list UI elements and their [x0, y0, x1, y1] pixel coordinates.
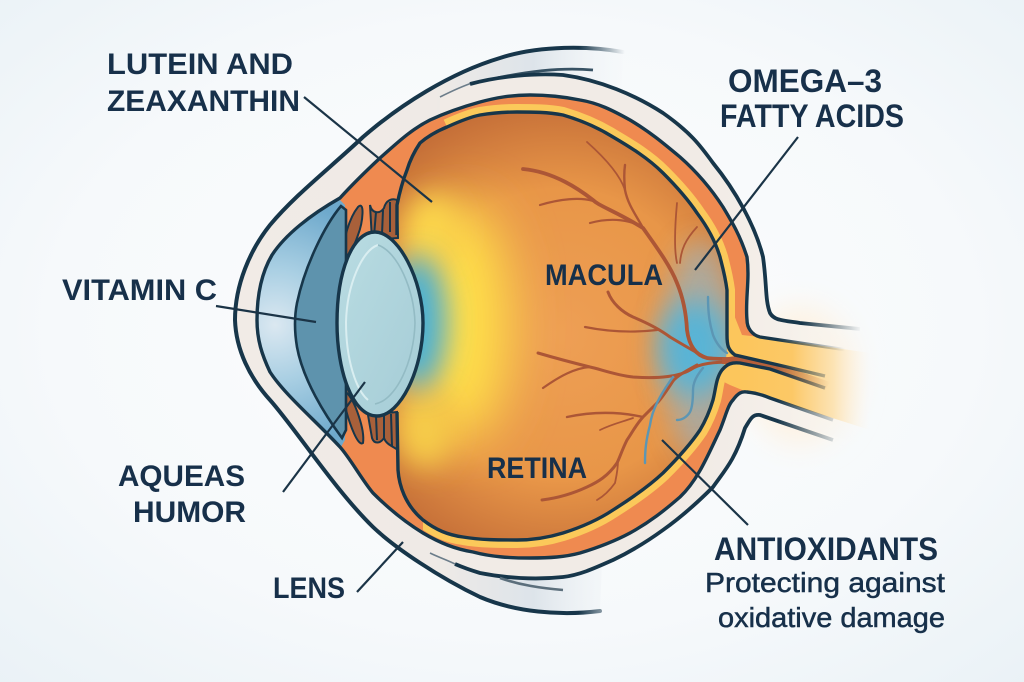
outline: sclera bottom — [455, 415, 833, 578]
optic nerve — [720, 300, 870, 430]
choroid band — [257, 95, 847, 558]
outline: sclera top — [470, 74, 860, 329]
ciliary muscle — [345, 392, 363, 443]
globe interior — [394, 114, 727, 538]
lower left yellow edge — [397, 392, 453, 468]
upper ciliary body — [337, 118, 447, 273]
lens — [337, 232, 423, 416]
label: omega-3 fatty acids — [720, 63, 904, 134]
ciliary fibres — [370, 199, 398, 240]
label: aqueas humor: HUMOR — [133, 496, 246, 529]
label: antioxidants: Protecting against — [705, 567, 945, 598]
ciliary muscle — [344, 206, 363, 256]
label: lutein and zeaxanthin — [107, 48, 300, 118]
leader: omega-3 — [695, 137, 798, 270]
outer eye layer fill — [235, 48, 623, 613]
orange base — [394, 114, 727, 538]
label: antioxidants — [705, 531, 945, 633]
leader: lens — [357, 542, 403, 592]
lens inner rim — [375, 245, 415, 404]
label: retina: RETINA — [487, 452, 587, 485]
upper left yellow edge — [404, 194, 460, 270]
grey tone near macula — [664, 240, 736, 460]
leader: antioxidants — [662, 440, 748, 525]
yellow glow — [414, 202, 510, 442]
label: antioxidants: ANTIOXIDANTS — [714, 531, 938, 567]
label: lens: LENS — [273, 572, 345, 605]
blue glow behind lens — [390, 256, 446, 388]
eye diagram — [235, 48, 875, 613]
label: omega-3 fatty acids: FATTY ACIDS — [720, 98, 904, 134]
label: lutein and zeaxanthin: ZEAXANTHIN — [107, 85, 300, 118]
fibre lines — [376, 414, 392, 446]
orange tissue — [336, 377, 423, 533]
outline: sclera tail bottom — [500, 578, 563, 590]
outline: sclera bottom taper — [430, 553, 455, 564]
label: aqueas humor — [118, 460, 246, 529]
leader: aqueous humor — [283, 382, 365, 492]
ciliary fibres — [368, 412, 398, 450]
sclera — [430, 74, 875, 578]
lens highlight — [346, 245, 378, 400]
outline: sclera top taper — [440, 83, 472, 97]
label: lutein and zeaxanthin: LUTEIN AND — [107, 48, 293, 81]
outline: retina top — [397, 112, 825, 376]
label: omega-3 fatty acids: OMEGA–3 — [728, 63, 882, 99]
optic nerve vessel bundle — [722, 356, 830, 390]
warm glow behind optic nerve — [745, 305, 855, 445]
cornea outer chamber — [257, 200, 345, 447]
blood vessels — [523, 142, 733, 500]
outline: sclera tail top — [497, 69, 593, 78]
blue optic disc glow — [659, 300, 731, 396]
fibre lines — [374, 202, 390, 236]
label: aqueas humor: AQUEAS — [118, 460, 245, 493]
lower ciliary body — [336, 377, 423, 533]
outline: choroid — [257, 95, 847, 558]
aqueous chamber — [295, 206, 346, 438]
label: macula: MACULA — [545, 259, 663, 292]
blue vessels — [645, 297, 727, 463]
outline: outer eyelid layer — [235, 48, 623, 613]
leader: lutein and zeaxanthin — [304, 97, 432, 202]
leader: vitamin C — [216, 306, 316, 322]
orange tissue — [337, 118, 447, 273]
yellow retina layer — [423, 112, 727, 540]
label: vitamin C: VITAMIN C — [62, 274, 217, 307]
label: antioxidants: oxidative damage — [718, 602, 945, 633]
lens body — [337, 232, 423, 416]
outline: retina bottom — [397, 363, 825, 540]
